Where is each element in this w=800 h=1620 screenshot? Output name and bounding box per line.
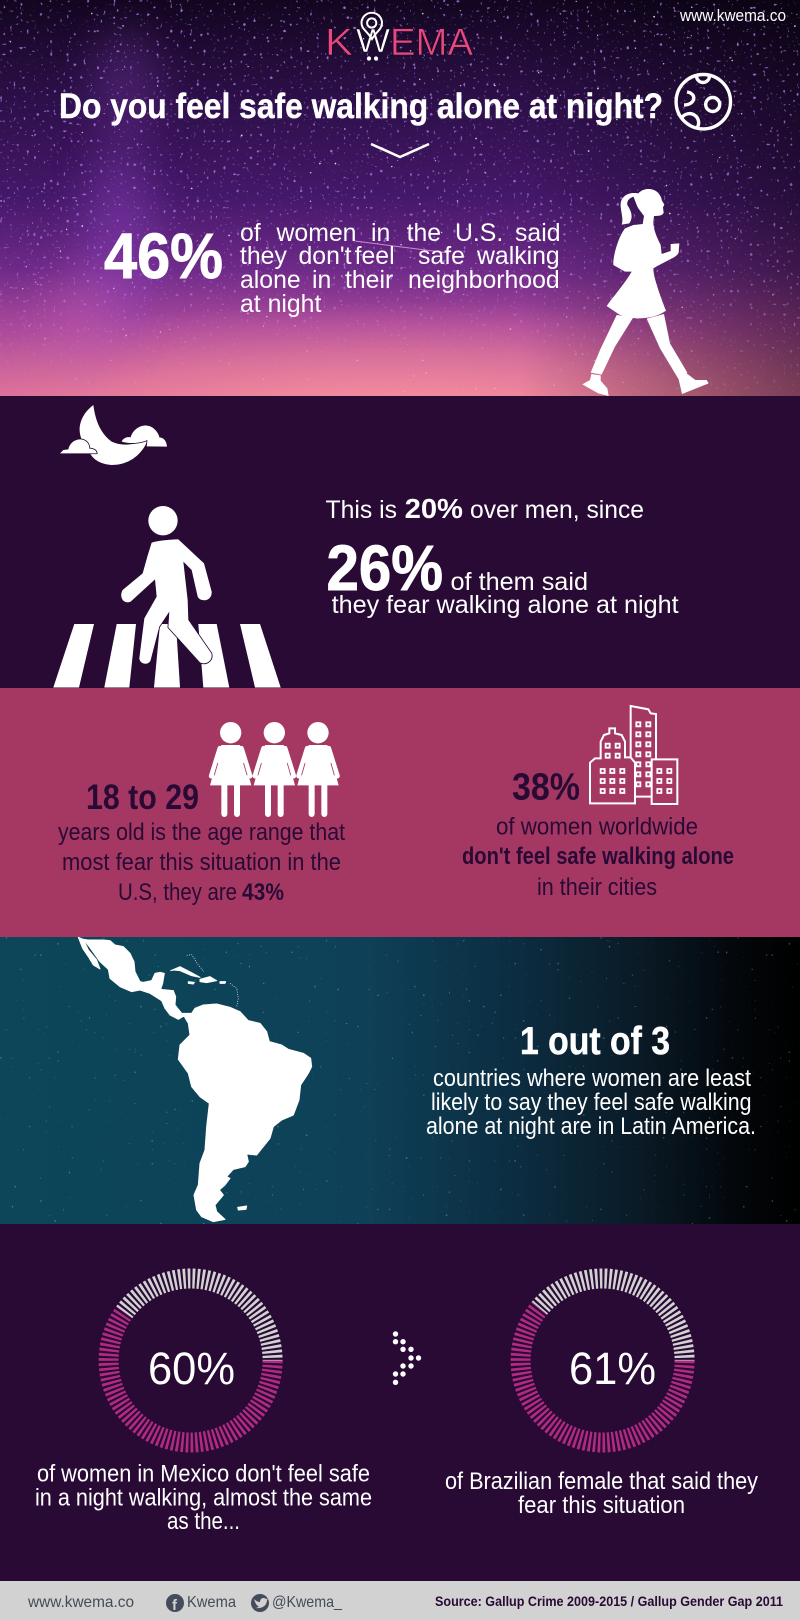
text: countries: likely to say they feel safe walking: [431, 1089, 752, 1116]
text: age range: [58, 819, 345, 906]
text: Brazil: [445, 1468, 758, 1519]
text: Brazil: fear this situation: [518, 1492, 685, 1519]
title: Do you feel safe walking alone at night?: [59, 87, 663, 126]
text: of them said: of them said: [450, 568, 588, 596]
site url top right: www.kwema.co: [679, 6, 786, 25]
chart: 61% ring: [521, 1278, 685, 1442]
text: women worldwide: in their cities: [537, 874, 657, 901]
text: 46% explanation: at night: [240, 291, 321, 318]
text: 46% explanation: safe: [418, 243, 465, 270]
footer bar: [0, 1581, 800, 1620]
text: age range: years old is the age range that: [58, 819, 345, 846]
facebook handle: Kwema: [187, 1594, 236, 1611]
text: countries: [426, 1065, 756, 1140]
text: Mexico: as the...: [167, 1508, 240, 1535]
stat: 61%: 61%: [569, 1343, 656, 1394]
panel: Mexico and Brazil: [36, 1268, 758, 1529]
logo: Kwema: [325, 13, 474, 64]
text: 46% explanation: feel: [355, 243, 395, 270]
stat: 46%: 46%: [104, 220, 223, 292]
stat: 26%: 26%: [326, 532, 443, 604]
text: age range: most fear this situation in the: [62, 849, 341, 876]
text: 46% explanation: U.S.: [455, 220, 503, 247]
stat: 1 out of 3: 1 out of 3: [520, 1020, 670, 1063]
text: 46% explanation: walking: [476, 243, 560, 270]
panel: Latin America starfield: [0, 937, 800, 1224]
map: Latin America: [78, 937, 312, 1222]
text: age range: U.S, they are: [118, 879, 237, 906]
text: 20% over men: This is: [326, 496, 397, 524]
icon: dotted arrow: [393, 1331, 421, 1385]
icon: city buildings: [590, 706, 677, 804]
text: women worldwide: [462, 814, 734, 901]
stat: 38%: 38%: [512, 766, 580, 808]
icon: crescent moon and clouds: [60, 405, 167, 465]
crosswalk stripes: [53, 624, 281, 688]
panel: rose statistics band: [0, 688, 800, 937]
text: of them said: they fear walking alone at night: [332, 591, 679, 619]
text: 46% explanation: in: [312, 267, 331, 294]
icon: facebook: [166, 1594, 184, 1614]
text: Mexico: in a night walking, almost the same: [35, 1485, 372, 1512]
icon: three women: [210, 722, 339, 814]
footer site url: www.kwema.co: [27, 1594, 134, 1611]
text: 46% explanation: in: [371, 220, 390, 247]
logo: Kwema: K: [325, 22, 353, 64]
text: countries: alone at night are in Latin America.: [426, 1113, 756, 1140]
icon: walking woman silhouette: [582, 189, 709, 396]
text: 20% over men: [326, 493, 644, 524]
icon: facebook: f: [172, 1597, 178, 1614]
text: 46% explanation: their: [345, 267, 393, 294]
text: women worldwide: don't feel safe walking alone: [462, 843, 734, 870]
text: of them said: [332, 568, 679, 619]
stat: 60%: 60%: [148, 1343, 235, 1394]
text: Brazil: of Brazilian female that said they: [445, 1468, 758, 1495]
panel: dark men comparison: [0, 396, 800, 688]
text: 46% explanation: don't: [298, 243, 352, 270]
stat: 18 to 29: 18 to 29: [86, 778, 199, 817]
text: 46% explanation: said: [515, 220, 560, 247]
walking figure: [121, 506, 212, 664]
icon: moon: [676, 74, 730, 129]
text: 46% explanation: they: [240, 243, 287, 270]
text: 46% explanation: the: [407, 220, 441, 247]
text: 46% explanation: women: [276, 220, 356, 247]
text: 46% explanation: alone: [240, 267, 301, 294]
panel: night sky header: [0, 0, 800, 396]
logo: Kwema: EMA: [390, 22, 474, 64]
text: age range: 43%: [242, 879, 284, 906]
twitter handle: @Kwema_: [272, 1594, 343, 1611]
text: women worldwide: of women worldwide: [496, 814, 698, 841]
text: 46% explanation: of: [240, 220, 261, 247]
text: 20% over men: over men, since: [470, 496, 644, 524]
text: Mexico: of women in Mexico don't feel safe: [37, 1461, 370, 1488]
text: 20% over men: 20%: [405, 493, 463, 524]
chart: 60% ring: [109, 1278, 273, 1442]
icon: chevron down: [371, 144, 429, 157]
text: 46% explanation: neighborhood: [408, 267, 560, 294]
text: countries: countries where women are least: [433, 1065, 751, 1092]
icon: pedestrian on crosswalk: [53, 506, 281, 688]
logo: Kwema: W: [356, 22, 391, 59]
text: Mexico: [35, 1461, 372, 1535]
icon: twitter: [251, 1594, 269, 1612]
